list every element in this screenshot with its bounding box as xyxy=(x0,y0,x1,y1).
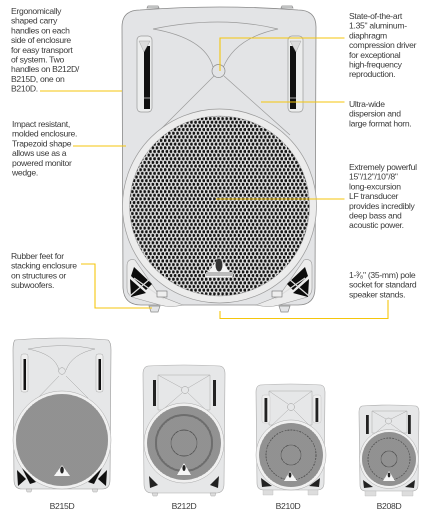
text: rubber feet: stacking enclosure xyxy=(11,261,77,271)
text: LF transducer: Extremely powerful xyxy=(349,162,417,172)
text: carry handles: Ergonomically xyxy=(11,6,62,16)
label: B212D: B212D xyxy=(172,501,196,511)
speaker: B210D xyxy=(256,384,326,495)
leader: LF transducer xyxy=(216,198,344,200)
label: B208D: B208D xyxy=(377,501,401,511)
text: dispersion and horn: dispersion and xyxy=(349,109,401,119)
text: compression driver: compression driver xyxy=(349,40,417,50)
text: LF transducer: provides incredibly xyxy=(349,201,415,211)
leader: molded enclosure xyxy=(73,145,126,147)
text: carry handles: side of enclosure xyxy=(11,35,71,45)
speaker: B215D xyxy=(13,338,111,492)
text: carry handles: B215D, one on xyxy=(11,74,65,84)
main speaker B215D front view xyxy=(122,6,316,312)
text: rubber feet: on structures or xyxy=(11,270,66,280)
label: B210D: B210D xyxy=(276,501,300,511)
text: molded enclosure: Impact resistant, xyxy=(12,119,70,129)
text: compression driver: reproduction. xyxy=(349,69,395,79)
text: LF transducer: 15"/12"/10"/8" xyxy=(349,172,398,182)
callout leader lines xyxy=(40,38,388,318)
leader: compression driver xyxy=(220,38,344,71)
text: carry handles: shaped carry xyxy=(11,16,58,26)
text: compression driver: 1.35" aluminum- xyxy=(349,21,407,31)
text: carry handles: handles on B212D/ xyxy=(11,64,80,74)
leader: rubber feet xyxy=(81,264,152,308)
text: pole socket: 1-³⁄₈" (35-mm) pole xyxy=(349,270,416,280)
text: LF transducer: acoustic power. xyxy=(349,220,404,230)
speaker: B212D xyxy=(143,365,225,496)
text: molded enclosure: powered monitor xyxy=(12,158,72,168)
text: compression driver: high-frequency xyxy=(349,60,403,70)
label: B215D: B215D xyxy=(50,501,74,511)
text: carry handles: B210D. xyxy=(11,84,38,94)
text: molded enclosure: Trapezoid shape xyxy=(12,138,72,148)
text: LF transducer: long-excursion xyxy=(349,181,401,191)
text: rubber feet: Rubber feet for xyxy=(11,251,64,261)
text: carry handles: for easy transport xyxy=(11,45,73,55)
text: molded enclosure: allows use as a xyxy=(12,148,67,158)
leader: pole socket xyxy=(220,300,388,318)
text: molded enclosure: wedge. xyxy=(11,168,38,178)
text: rubber feet: subwoofers. xyxy=(11,280,54,290)
speaker: B208D xyxy=(359,405,419,496)
text: pole socket: socket for standard xyxy=(349,280,417,290)
text: pole socket: speaker stands. xyxy=(349,289,405,299)
text: molded enclosure: molded enclosure. xyxy=(12,129,77,139)
text: LF transducer: deep bass and xyxy=(349,210,402,220)
text: compression driver: for exceptional xyxy=(349,50,401,60)
text: compression driver: diaphragm xyxy=(349,30,387,40)
text: LF transducer: LF transducer xyxy=(349,191,399,201)
leader: carry handles xyxy=(40,90,122,92)
text: dispersion and horn: Ultra-wide xyxy=(349,99,385,109)
text: carry handles: of system. Two xyxy=(11,54,64,64)
leader: dispersion and horn xyxy=(261,101,344,103)
text: carry handles: handles on each xyxy=(11,25,70,35)
text: compression driver: State-of-the-art xyxy=(349,11,403,21)
text: dispersion and horn: large format horn. xyxy=(349,118,411,128)
